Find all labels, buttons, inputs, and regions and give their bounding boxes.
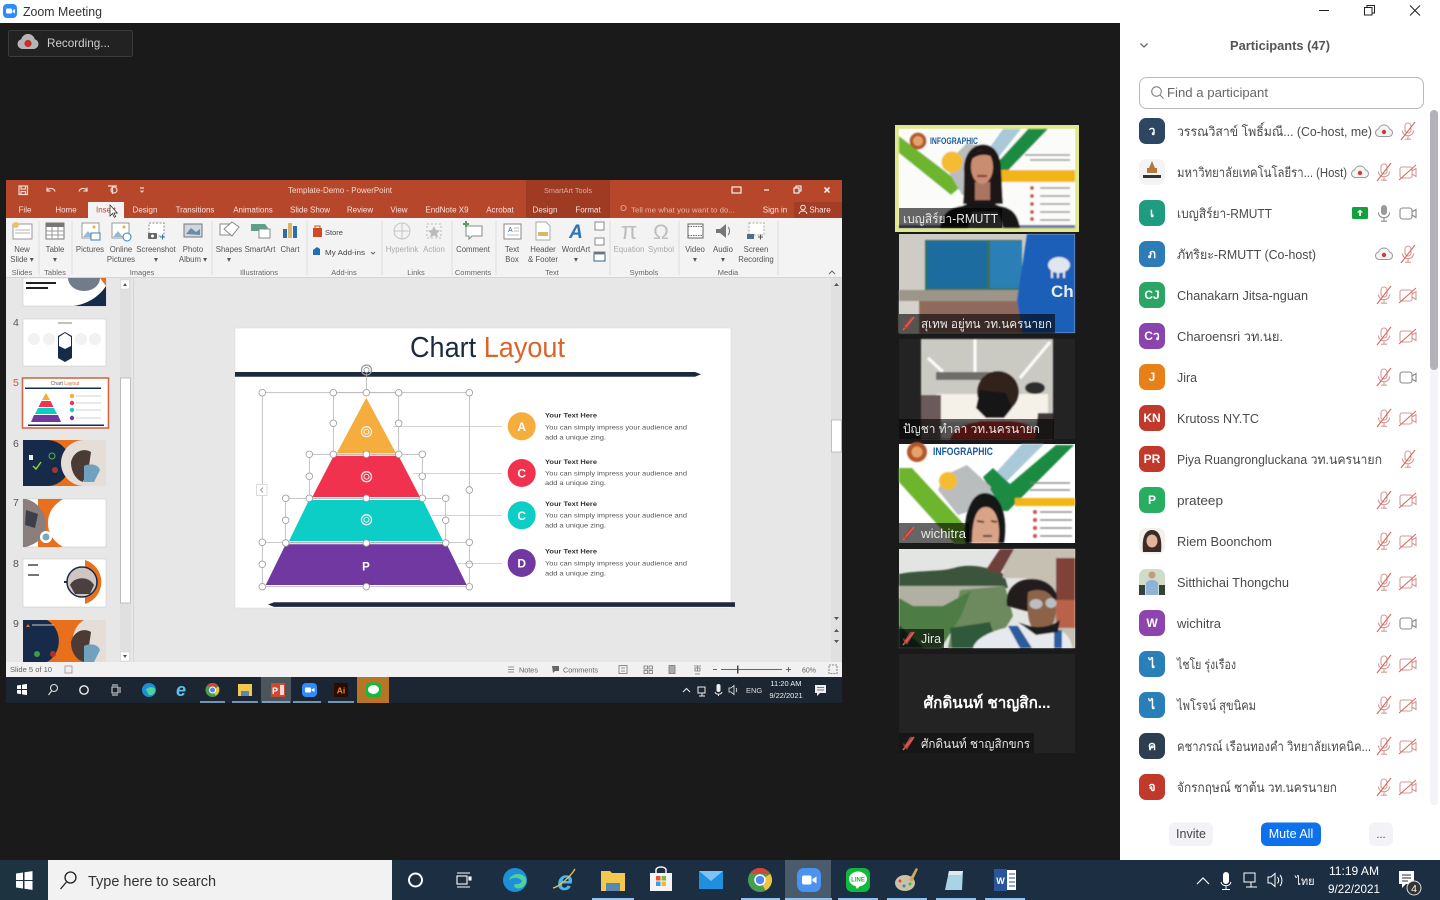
mute all button: Mute All [1269,827,1313,841]
icon: comment [463,221,482,239]
ribbon tabs: View [390,206,408,214]
participant: Charoensri: Charoensri วท.นย. [1177,329,1283,344]
name label: wichitra [920,527,966,541]
thumbnail numbers: 9 [13,618,19,630]
ribbon: ▾ [154,255,158,264]
icon: small text tools [594,222,605,261]
icon: illustrator [334,683,348,697]
powerpoint status bar: Slide 5 of 10 [10,667,52,674]
item C teal: Your Text Here [545,501,597,508]
ribbon: Add-ins [331,268,357,277]
icon: symbol: Ω [653,221,669,244]
ribbon tabs: Home [55,206,77,214]
icon: new slide [13,222,32,239]
icon: word [994,869,1016,891]
icon: video [688,224,703,238]
participant: host: มหาวิทยาลัยเทคโนโลยีรา... (Host) [1177,165,1347,180]
ribbon tabs: Transitions [176,206,214,214]
icon: header and footer [536,222,550,240]
icon: online pictures [112,223,131,241]
icon: task view [457,873,471,887]
item C red: Your Text Here [545,459,597,466]
panel heading: Participants (47) [1230,39,1330,53]
powerpoint title bar: Template-Demo - PowerPoint [288,186,393,195]
ribbon: WordArt [562,245,591,254]
thumbnail 5 selected: Chart Layout [51,381,80,387]
ribbon: Hyperlink [386,245,418,254]
workspace background [6,278,842,662]
pyramid chart: P [362,562,370,574]
participant: Krutoss [1139,405,1416,431]
ribbon: Pictures [107,255,135,264]
participant: ไพโรจน์: ไ [1147,697,1155,712]
thumbnail numbers: 4 [13,317,19,329]
ribbon: Text [545,268,560,277]
thumbnail 4 [23,319,106,366]
name label: สุเทพ อยู่ทน วท.นครนายก [921,317,1052,332]
video tile: sakdinon [899,654,1075,753]
ribbon tabs: Tell me what you want to do... [631,206,735,214]
participant: Chanakarn: Chanakarn Jitsa-nguan [1177,288,1308,303]
mouse cursor [110,205,117,217]
participant: Riem [1139,528,1416,554]
item C red: You can simply impress your audience and [545,470,687,477]
icon: smartart [251,224,270,238]
taskbar active underlines [592,898,1025,900]
ribbon: Chart [280,245,300,254]
participant: presenter: เ [1150,206,1154,220]
ribbon: Screen [744,245,768,254]
powerpoint status bar [6,662,842,677]
panel: participants [1120,0,1440,860]
icon: task view [112,685,120,695]
item D: You can simply impress your audience and [545,561,687,568]
icon: wordart: A [568,222,583,243]
ribbon: SmartArt [245,245,276,254]
icon: collapse chevron [1140,44,1148,47]
ribbon tabs: Sign in [763,206,787,214]
item C red: C [517,466,526,480]
participant: Chanakarn [1139,282,1416,308]
participant: Piya: PR [1144,452,1161,466]
participant: presenter [1139,200,1416,226]
name label [899,208,1002,228]
slide heading: Chart Layout [410,332,565,364]
icon: line [846,868,870,892]
participant: ภัทริยะ: ภ [1148,247,1156,261]
ribbon: Images [130,268,155,277]
item A: A [517,420,526,434]
system tray: 9/22/2021 [1328,882,1380,896]
ribbon: Box [505,255,519,264]
ribbon tabs: Acrobat [486,206,515,214]
ribbon: Photo [183,245,204,254]
participant: วรรณวิสาข์ [1139,118,1415,144]
icon: photo album [184,224,202,237]
search box: Find a participant [1167,85,1268,100]
participant: presenter: เบญสิร์ยา-RMUTT [1177,206,1272,221]
ribbon tabs: EndNote X9 [425,206,469,214]
participant: ไพโรจน์ [1139,692,1416,718]
panel: slide thumbnails [13,278,134,662]
ribbon: Illustrations [240,268,278,277]
participant: Charoensri: Cว [1144,329,1160,343]
powerpoint status bar: 60% [802,668,816,674]
thumbnail scrollbar [120,278,131,662]
ribbon tabs: Animations [233,206,273,214]
name label: ปัญชา ทำลา วท.นครนายก [903,422,1040,436]
video tile: wichitra: INFOGRAPHIC [933,446,993,458]
participant: Krutoss: KN [1143,411,1161,425]
icon: powerpoint [271,683,285,697]
participant: จักรกฤษณ์: จ [1148,780,1156,794]
item D [508,549,687,577]
powerpoint title bar: SmartArt Tools [544,186,592,195]
icon: zoom logo [3,4,17,18]
item D: Your Text Here [545,549,597,556]
participant: Riem: Riem Boonchom [1177,534,1272,549]
icon: chrome [748,868,772,892]
participant: ไชโย: ไ [1147,656,1155,671]
display name: ศักดินนท์ ชาญสิก... [924,693,1050,713]
icon: my add-ins [313,247,375,257]
thumbnail 5 selected [22,378,108,428]
participant: คชาภรณ์ [1139,733,1416,759]
ribbon: & Footer [528,255,558,264]
ribbon tabs: Share [809,206,831,214]
participant: วรรณวิสาข์: ว [1149,124,1156,138]
ribbon: Album ▾ [179,255,207,264]
recording badge [8,30,132,56]
icon: table [46,223,64,239]
participant: จักรกฤษณ์ [1139,774,1416,800]
video tile: wichitra [899,442,1075,543]
ribbon: Equation [614,245,644,254]
icon: screen recording [747,223,764,240]
icon: store: Store [325,228,343,237]
icon: illustrator: Ai [337,686,345,696]
top rule [235,372,701,377]
participant: ภัทริยะ: ภัทริยะ-RMUTT (Co-host) [1177,247,1316,262]
icon: start [16,871,32,890]
icon: store [650,867,672,891]
thumbnail numbers: 8 [13,558,19,570]
icon: internet explorer: e [557,865,573,896]
ribbon: Comments [455,268,491,277]
ribbon: Slide ▾ [10,255,34,264]
ribbon: ▾ [574,255,578,264]
item A [508,412,687,441]
slide scrollbar [831,278,842,662]
icon: shapes [220,222,239,236]
system tray: ไทย [1294,875,1315,888]
video tile: jira [899,549,1075,648]
system tray: 9/22/2021 [769,691,803,700]
ribbon: Symbols [630,268,659,277]
icon: edge [142,683,156,697]
participant: Jira [1139,364,1416,390]
ribbon tabs: Design [533,206,557,214]
mute all button [1261,822,1321,846]
icon: text box: A [508,227,513,234]
panel: shared PowerPoint window [6,180,842,703]
icon: chrome [206,683,220,697]
ribbon: Table [46,245,64,254]
name label [899,523,969,543]
window title: Zoom Meeting [23,5,102,19]
ribbon: Text [505,245,520,254]
text pane toggle [256,484,267,496]
item C teal: add a unique zing. [545,523,606,530]
participant: host [1139,159,1416,185]
ribbon tabs: Insert [96,206,117,214]
ribbon tabs: File [19,206,32,214]
system tray [1197,864,1421,896]
ribbon: ▾ [721,255,725,264]
powerpoint title bar [6,180,842,218]
item C red [508,459,687,487]
icon: search [48,684,58,695]
item D: D [517,556,526,570]
participant: Charoensri [1139,323,1416,349]
connector lines [393,427,502,563]
video tile: presenter [895,125,1079,232]
recording badge: Recording... [47,36,110,50]
icon: action [427,224,441,238]
icon: window buttons [732,186,830,193]
name label [899,419,1054,439]
ribbon [6,218,842,278]
icon: equation: π [621,218,637,245]
ribbon: ▾ [53,255,57,264]
icon: zoom [302,683,317,697]
item C teal [508,501,687,530]
participant: wichitra [1139,610,1416,636]
icon: rotate handles [362,365,372,525]
icon: notifications [1399,871,1421,895]
system tray: 11:20 AM [770,679,802,688]
ribbon: Media [718,268,739,277]
name label: Jira [921,632,941,646]
ribbon: Action [423,245,445,254]
more button: ... [1376,829,1386,841]
bottom rule [268,602,735,607]
thumbnail 9 [23,620,106,662]
participant: จักรกฤษณ์: จักรกฤษณ์ ชาต้น วท.นครนายก [1177,780,1337,795]
icon: paint [895,868,918,891]
ribbon: New [14,245,30,254]
icon: word: W [996,876,1005,886]
more button [1369,822,1393,846]
participant: Piya: Piya Ruangrongluckana วท.นครนายก [1177,452,1382,467]
icon: internet explorer: e [176,680,186,700]
participant: วรรณวิสาข์: วรรณวิสาข์ โพธิ์มณี... (Co-host, me) [1177,122,1372,139]
ribbon: Online [110,245,132,254]
participant: Piya [1139,446,1415,472]
search box [48,860,392,900]
zoom window title bar [0,0,1440,23]
participant: Chanakarn: CJ [1144,288,1160,302]
icon: notifications: 4 [1411,883,1417,895]
ribbon: ▾ [693,255,697,264]
ribbon: Comment [456,245,491,254]
icon: screenshot [148,223,165,240]
item D: add a unique zing. [545,570,606,577]
participant: คชาภรณ์: คชาภรณ์ เรือนทองคำ วิทยาลัยเทคนิค... [1177,739,1371,754]
thumbnail numbers: 5 [13,377,19,389]
item A: Your Text Here [545,413,597,420]
system tray: 11:19 AM [1329,864,1379,878]
name label: ศักดินนท์ ชาญสิกขกร [921,737,1030,751]
name label [899,733,1034,753]
local windows taskbar [0,860,1440,900]
ribbon: Tables [44,268,66,277]
search box: Type here to search [88,873,216,890]
thumbnail numbers: 7 [13,497,19,509]
item A: You can simply impress your audience and [545,425,687,432]
item A: add a unique zing. [545,434,606,441]
participant: ภัทริยะ [1139,241,1415,267]
video tile: sutep [899,234,1075,333]
name label: เบญสิร์ยา-RMUTT [903,212,998,226]
icon: file explorer [601,871,625,891]
search box [1140,78,1424,108]
thumbnail 8 [23,559,106,607]
icon: zoom [797,868,821,892]
powerpoint status bar: Comments [563,668,599,674]
thumbnail numbers: 6 [13,438,19,450]
icon: powerpoint: P [272,686,278,696]
item C teal: You can simply impress your audience and [545,513,687,520]
participant: ไชโย: ไชโย รุ่งเรือง [1176,657,1236,673]
participant: Jira: Jira [1177,370,1198,385]
icon: store [313,226,343,237]
ribbon tabs: Design [133,206,157,214]
invite button [1169,822,1213,846]
powerpoint status bar: Notes [519,668,539,674]
selection boxes [256,365,473,590]
icon: edge [503,868,527,892]
ribbon: Slides [12,268,32,277]
thumbnail 6 [23,440,106,486]
participant: wichitra: wichitra [1176,616,1222,631]
icon: cortana [409,874,422,886]
icon: audio [716,224,730,238]
video tile: sutep: Ch [1051,282,1074,301]
icon: chart [283,223,297,238]
window controls [1319,6,1420,16]
icon: notepad [945,871,963,890]
icon: cortana [80,686,88,694]
participant: Krutoss: Krutoss NY.TC [1177,411,1259,426]
panel: video gallery [895,125,1079,753]
icon: my add-ins: My Add-ins [325,248,365,257]
icon: text box [504,224,521,239]
thumbnail 7 [23,499,106,547]
system tray: ENG [746,686,762,695]
icon: start [17,684,27,695]
item C teal: C [517,509,526,523]
icon: pictures [82,223,100,240]
ribbon: Audio [713,245,734,254]
presenter windows taskbar [6,677,842,703]
ribbon: Symbol [648,245,674,254]
icon: mail [699,871,723,889]
thumbnail 3 [23,278,106,306]
name label [899,629,944,648]
item C red: add a unique zing. [545,480,606,487]
ribbon: Screenshot [136,245,177,254]
participant: คชาภรณ์: ค [1148,739,1156,753]
ribbon: Recording [738,255,774,264]
ribbon: Links [407,268,425,277]
pyramid chart [256,365,473,590]
participant: Sitthichai: Sitthichai Thongchu [1177,575,1289,590]
ribbon tabs: Format [575,206,601,214]
icon: hyperlink [394,223,410,239]
participant: prateep: P [1148,493,1156,507]
ribbon: Video [685,245,706,254]
system tray [683,679,826,700]
participant: prateep: prateep [1177,493,1223,508]
video tile: presenter: INFOGRAPHIC [930,136,978,146]
icon: line: LINE [851,878,865,884]
ribbon: Shapes [216,245,242,254]
participant: ไชโย [1139,651,1416,677]
ribbon: Header [530,245,556,254]
participant: prateep [1139,487,1416,513]
participant scrollbar [1430,110,1438,805]
underlines [200,701,354,703]
video tile: panya [899,339,1075,439]
ribbon: Pictures [76,245,104,254]
participant: Jira: J [1149,370,1155,384]
icon: file explorer [238,684,252,696]
ribbon: ▾ [227,255,231,264]
thumbnail numbers [13,317,19,630]
icon: quick access toolbar [19,186,144,194]
icon: line [366,682,381,698]
ribbon tabs: Slide Show [290,206,330,214]
name label [899,314,1055,333]
ribbon tabs [19,202,831,218]
participant: ไพโรจน์: ไพโรจน์ สุขนิคม [1176,698,1256,714]
panel: slide chart layout [235,328,735,608]
invite button: Invite [1176,827,1206,841]
participant: Sitthichai [1139,569,1416,595]
ribbon tabs: Review [347,206,373,214]
participant: wichitra: W [1146,616,1158,630]
